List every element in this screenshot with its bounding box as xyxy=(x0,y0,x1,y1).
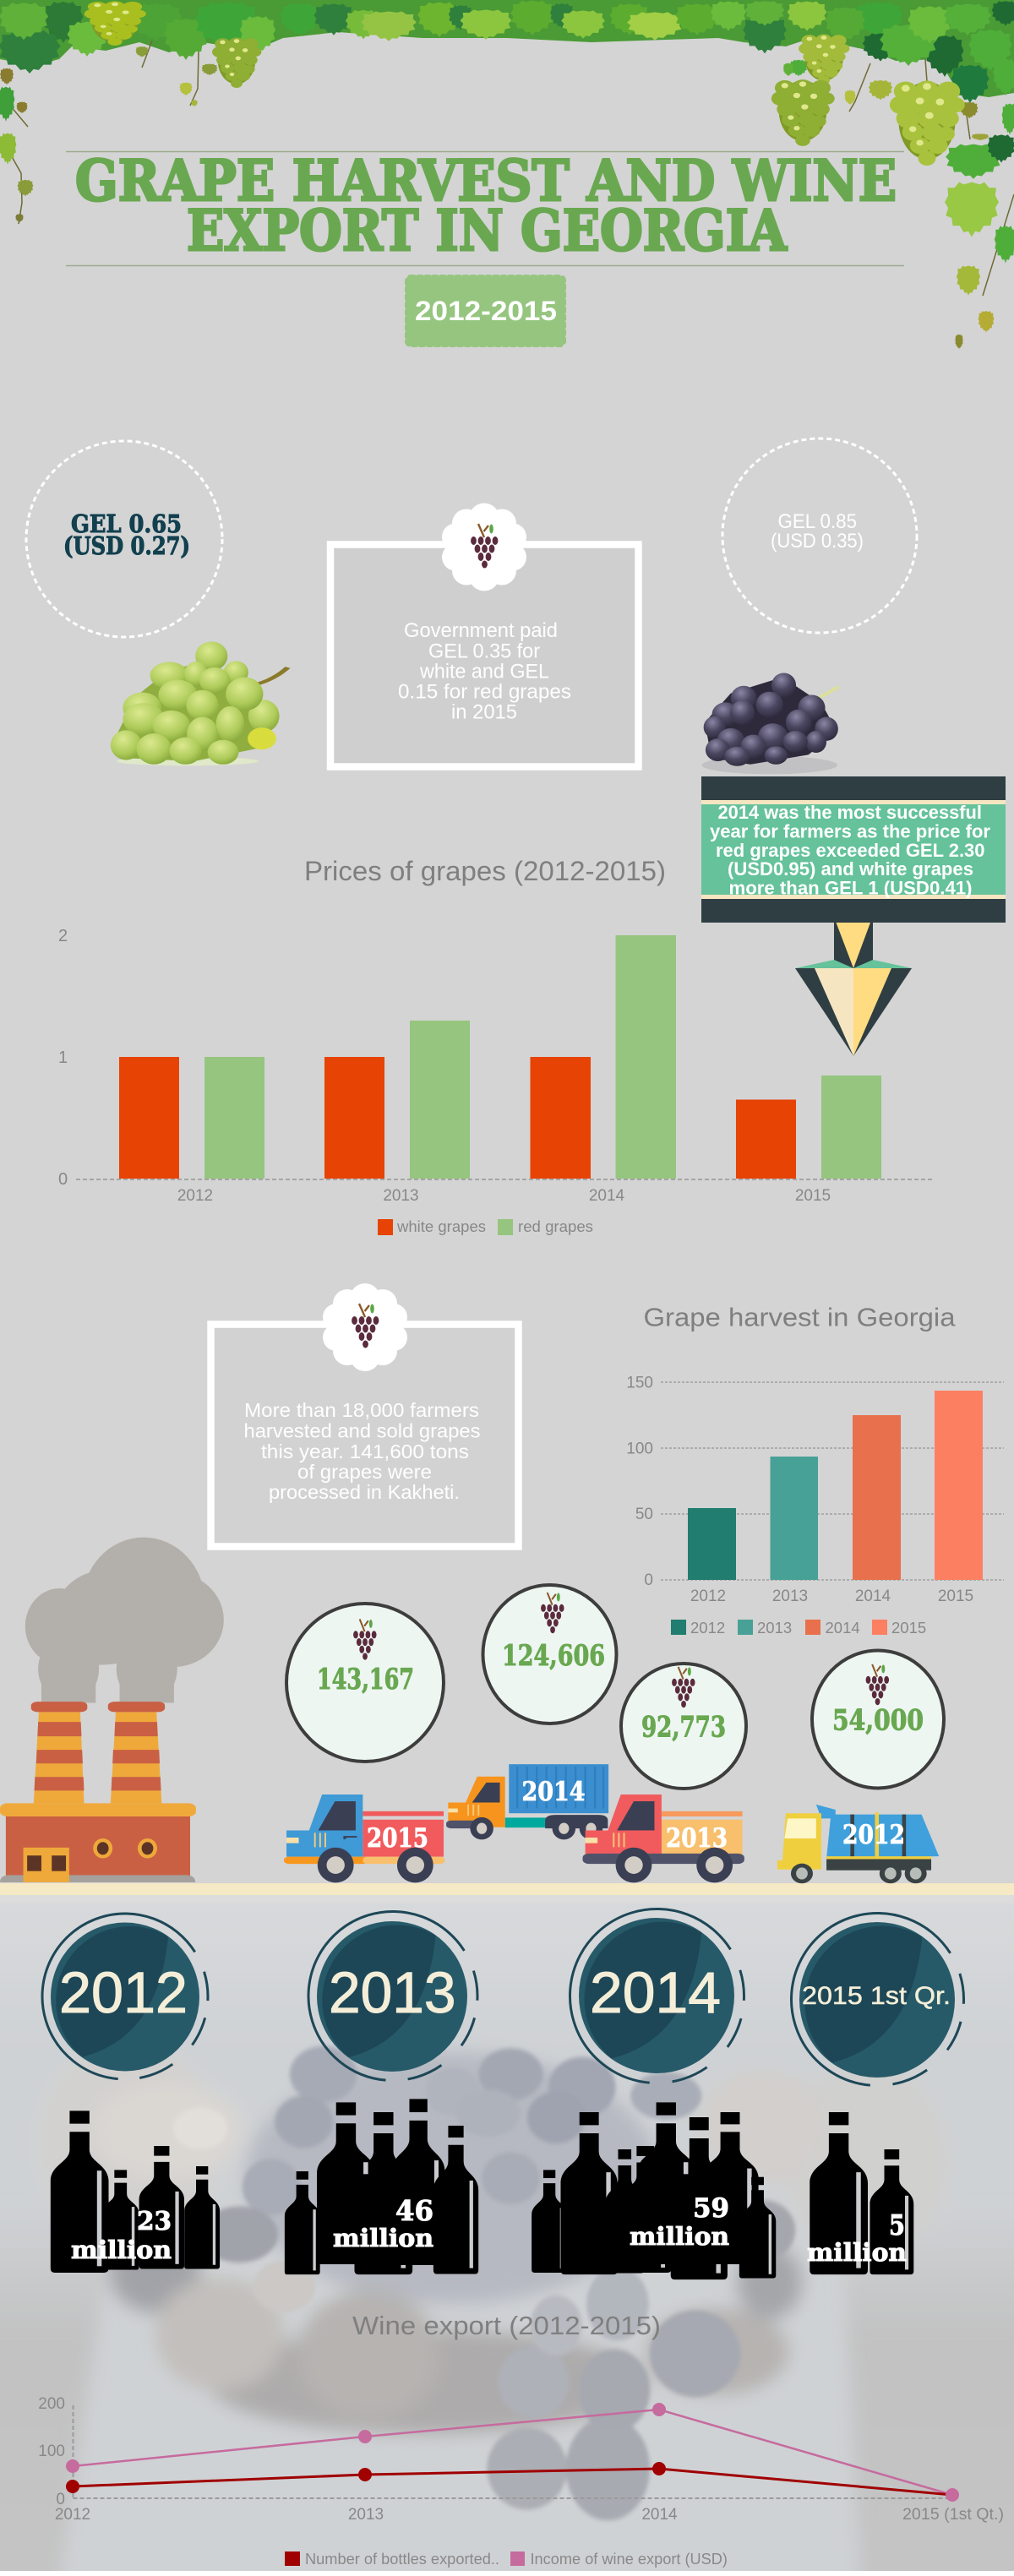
background photo: hands holding grapes xyxy=(0,2043,1014,2571)
bar chart: grape harvest: 100 xyxy=(626,1440,653,1458)
series: income of wine export xyxy=(66,2403,952,2495)
truck: 2013: 2013 xyxy=(666,1823,728,1854)
vine leaves and hanging grapes xyxy=(0,0,1014,349)
line chart: wine export: 2012 xyxy=(55,2506,90,2524)
bottles: 2013, 46 million: 46 xyxy=(395,2194,433,2227)
truck: 2015: 2015 xyxy=(367,1823,428,1854)
bubble: 143,167 xyxy=(286,1604,444,1762)
bottles: 2014, 59 million xyxy=(532,2102,776,2279)
photo: red grapes xyxy=(701,673,839,774)
bar chart: grape prices: 2013 xyxy=(383,1187,419,1205)
government price text xyxy=(398,619,571,723)
bubble: 124,606: 124,606 xyxy=(502,1639,605,1673)
truck: 2015 xyxy=(284,1794,445,1882)
series: bottles exported xyxy=(66,2462,959,2502)
callout: 2014 most successful year: 2014 was the most successful xyxy=(718,802,982,823)
government price text: Government paid xyxy=(404,619,558,642)
bottles: 2012, 23 million: 23 xyxy=(137,2207,172,2236)
bar chart: grape prices: 2012 xyxy=(177,1187,213,1205)
farmers text: harvested and sold grapes xyxy=(243,1419,480,1441)
legend: grape prices xyxy=(378,1218,593,1235)
year badge: 2015 first quarter xyxy=(770,1892,985,2107)
bar chart: grape prices: 2014 xyxy=(589,1187,625,1205)
panel: government price note xyxy=(330,504,639,767)
farmers text: of grapes were xyxy=(297,1461,432,1483)
line chart: wine export: 0 xyxy=(56,2491,65,2508)
white grape price circle: GEL 0.65 xyxy=(71,509,182,538)
truck: 2013 xyxy=(583,1794,744,1882)
year badge: 2014 xyxy=(548,1887,766,2105)
bottles: 2014, 59 million: 59 xyxy=(693,2193,729,2224)
bar chart: grape prices xyxy=(58,927,933,1235)
chart title: grape harvest: Grape harvest in Georgia xyxy=(644,1303,956,1332)
illustration: factory with smoke xyxy=(0,1538,224,1882)
bar chart: grape prices: 2015 xyxy=(795,1187,831,1205)
legend: grape harvest: 2013 xyxy=(757,1619,792,1637)
band between road and photo xyxy=(0,1895,1014,1903)
bar chart: grape harvest: 2015 xyxy=(938,1588,973,1605)
white grape price circle: (USD 0.27) xyxy=(63,531,190,560)
title: EXPORT IN GEORGIA xyxy=(187,198,788,264)
red grape price circle xyxy=(722,438,917,633)
bar chart: grape harvest: 150 xyxy=(626,1374,653,1392)
bubble: 143,167: 143,167 xyxy=(317,1663,414,1696)
bottles: 2013, 46 million: million xyxy=(333,2224,433,2252)
bar chart: grape harvest: 2013 xyxy=(772,1588,808,1605)
government price text: GEL 0.35 for xyxy=(428,640,540,662)
bubble: 124,606 xyxy=(483,1585,617,1724)
red grape price circle: GEL 0.85 xyxy=(777,510,857,533)
callout: 2014 most successful year: (USD0.95) and white grapes xyxy=(728,858,973,880)
bar chart: grape prices: 1 xyxy=(58,1048,68,1067)
truck: 2014 xyxy=(446,1764,608,1839)
bubble: 92,773: 92,773 xyxy=(641,1710,726,1744)
bar chart: grape harvest: 50 xyxy=(635,1506,653,1523)
bottles: 2015, 5 million: 5 xyxy=(889,2208,905,2241)
white grape price circle xyxy=(26,441,222,637)
government price text: 0.15 for red grapes xyxy=(398,681,571,703)
line chart: wine export: 2015 (1st Qt.) xyxy=(902,2506,1004,2524)
year badge: 2015 first quarter: 2015 1st Qr. xyxy=(802,1982,951,2010)
legend: grape harvest: 2014 xyxy=(825,1619,860,1637)
callout: 2014 most successful year: year for farmers as the price for xyxy=(710,821,990,841)
truck: 2012 xyxy=(777,1805,939,1883)
line chart: wine export: 2013 xyxy=(348,2506,384,2524)
bar chart: grape harvest: 2014 xyxy=(855,1588,891,1605)
farmers text: More than 18,000 farmers xyxy=(244,1399,479,1421)
date badge xyxy=(407,277,564,345)
bottom edge xyxy=(0,2571,1014,2576)
year badge: 2012: 2012 xyxy=(59,1960,188,2025)
callout: 2014 most successful year xyxy=(701,776,1006,923)
bubble: 92,773 xyxy=(621,1664,746,1789)
line chart: wine export: 2014 xyxy=(641,2506,678,2524)
year badge: 2014: 2014 xyxy=(590,1960,721,2025)
photo: white grapes xyxy=(111,641,288,765)
smoke cloud xyxy=(25,1538,224,1702)
chart title: wine export: Wine export (2012-2015) xyxy=(352,2311,661,2340)
bar chart: grape prices: 0 xyxy=(58,1170,68,1189)
bottles: 2013, 46 million xyxy=(285,2099,478,2274)
bottles: 2015, 5 million: million xyxy=(807,2238,907,2267)
bubble: 54,000: 54,000 xyxy=(832,1703,924,1737)
farmers text: processed in Kakheti. xyxy=(269,1481,460,1503)
legend: grape harvest: 2012 xyxy=(690,1619,725,1637)
red grape price circle: (USD 0.35) xyxy=(771,530,864,553)
legend: wine export: Number of bottles exported.. xyxy=(305,2551,499,2568)
icon: grape flower badge xyxy=(323,1283,407,1371)
government price text: in 2015 xyxy=(451,701,517,723)
legend: grape harvest xyxy=(671,1619,926,1637)
bubble: 54,000 xyxy=(812,1651,944,1788)
legend: grape harvest: 2015 xyxy=(891,1619,926,1637)
title xyxy=(66,148,904,265)
legend: grape prices: red grapes xyxy=(518,1218,593,1235)
legend: grape prices: white grapes xyxy=(396,1218,486,1235)
icon: grape flower badge xyxy=(442,504,526,591)
year badge: 2013: 2013 xyxy=(329,1960,456,2025)
bottles: 2014, 59 million: million xyxy=(630,2222,729,2251)
title: GRAPE HARVEST AND WINE xyxy=(75,148,897,214)
bar chart: grape prices: 2 xyxy=(58,927,68,945)
legend: wine export: Income of wine export (USD) xyxy=(531,2551,728,2568)
line chart: wine export: 200 xyxy=(38,2395,65,2413)
bottles: 2012, 23 million: million xyxy=(71,2236,172,2264)
panel: farmers note xyxy=(211,1283,519,1546)
road xyxy=(0,1883,1014,1896)
bottles: 2015, 5 million xyxy=(807,2112,913,2274)
chart title: prices of grapes: Prices of grapes (2012-2015) xyxy=(304,856,666,886)
line chart: wine export xyxy=(38,2395,1004,2568)
farmers text xyxy=(243,1399,480,1503)
government price text: white and GEL xyxy=(419,661,549,683)
callout: 2014 most successful year: red grapes exceeded GEL 2.30 xyxy=(716,840,985,861)
bar chart: grape harvest xyxy=(626,1374,1004,1637)
truck: 2014: 2014 xyxy=(522,1777,585,1807)
bar chart: grape harvest: 2012 xyxy=(690,1588,726,1605)
line chart: wine export: 100 xyxy=(38,2443,65,2460)
date badge: 2012-2015 xyxy=(415,296,557,326)
legend: wine export xyxy=(285,2551,728,2568)
arrow: pointing at 2015 bars xyxy=(795,923,912,1056)
callout: 2014 most successful year: more than GEL 1 (USD0.41) xyxy=(728,877,972,899)
bar chart: grape harvest: 0 xyxy=(644,1571,653,1589)
year badge: 2012 xyxy=(22,1893,228,2099)
bottles: 2012, 23 million xyxy=(51,2110,220,2273)
farmers text: this year. 141,600 tons xyxy=(261,1440,469,1462)
truck: 2012: 2012 xyxy=(842,1820,905,1850)
year badge: 2013 xyxy=(287,1891,499,2101)
